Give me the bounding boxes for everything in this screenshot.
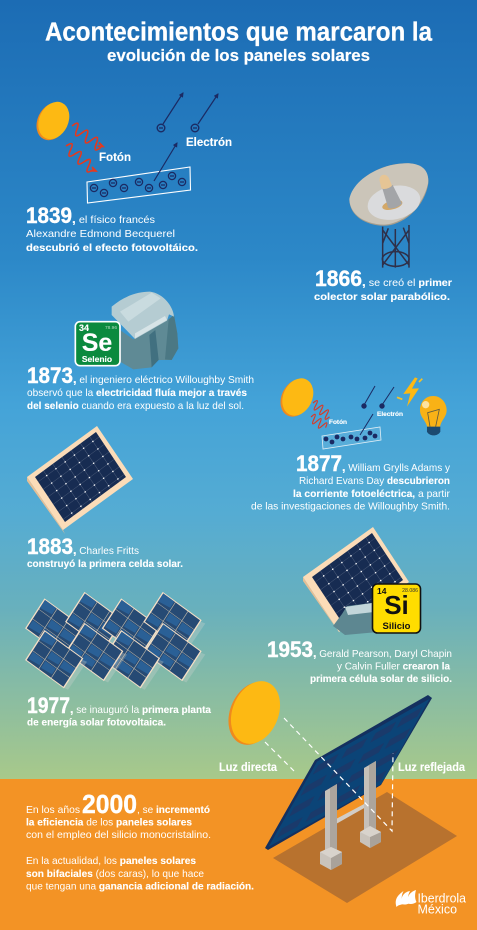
dashed light rays (265, 718, 393, 831)
text: 1883: 1883 (27, 534, 73, 559)
label: Luz directa: Luz directa (219, 762, 278, 774)
text: 2000: con el empleo del silicio monocristalino. (26, 829, 211, 841)
badge text: Se: 78.96 (105, 325, 117, 331)
element badge: silicon: Si (384, 590, 409, 620)
text: 1866: colector solar parabólico. (314, 291, 450, 303)
text: actualidad: son bifaciales (dos caras), lo que hace (26, 868, 204, 880)
text: 1839 (26, 203, 198, 254)
text: 1839: descubrió el efecto fotovoltáico. (26, 242, 198, 254)
orange ground panel (0, 779, 477, 930)
text: 1977: de energía solar fotovoltaica. (27, 716, 166, 728)
illustration: solar cell 1883 (27, 426, 133, 534)
text: 1873: del selenio cuando era expuesto a la luz del sol. (27, 400, 244, 412)
text: 1977 (27, 693, 211, 728)
text: 1839: Alexandre Edmond Becquerel (26, 228, 175, 240)
illustration: selenium rock and element badge (75, 292, 178, 369)
text: 1873 (27, 363, 254, 412)
tower (382, 225, 409, 268)
text: 1877: 1877 (296, 451, 342, 476)
front post (320, 784, 342, 870)
text: 1953: primera célula solar de silicio. (310, 673, 452, 685)
text: 2000 (26, 789, 211, 841)
text: 1866 (314, 266, 452, 303)
text: 1877 (251, 451, 451, 512)
label: Electrón small: Electrón (377, 411, 403, 418)
label: Luz reflejada: Luz reflejada (398, 762, 466, 774)
badge text: Se: 34 (79, 323, 89, 333)
text: 1877: , William Grylls Adams y (342, 459, 451, 474)
text: 1873: 1873 (27, 363, 73, 388)
bifacial solar panel (265, 695, 432, 850)
text: 1953: y Calvin Fuller crearon la (337, 660, 450, 672)
icon: photon waves (308, 400, 332, 431)
title (45, 18, 433, 65)
text: 1877: la corriente fotoeléctrica, a partir (293, 488, 450, 500)
badge text: Se: Se (82, 329, 112, 357)
text: 1839: , el físico francés (72, 211, 155, 226)
badge text: Se: Selenio (82, 354, 112, 364)
element badge: silicon (372, 584, 420, 633)
logo: Iberdrola México: México (418, 902, 457, 916)
badge text: Se (79, 323, 117, 364)
element badge: silicon: Silicio (383, 621, 411, 632)
text: 1877: de las investigaciones de Willoughby Smith. (251, 500, 450, 512)
text: 2000: En los años (26, 804, 80, 816)
text: 2000: la eficiencia de los paneles solares (26, 816, 192, 828)
illustration: solar panel and silicon 1953 (303, 527, 420, 635)
solar panel (303, 527, 409, 635)
dish (349, 163, 428, 226)
text: 1873: observó que la electricidad fluía mejor a través (27, 387, 247, 399)
text: 1953: , Gerald Pearson, Daryl Chapin (313, 645, 452, 660)
text: 1866: , se creó el primer (362, 274, 452, 289)
silicon rock (333, 603, 378, 635)
label: Fotón: Fotón (99, 152, 131, 164)
illustration: photoelectric effect 1839 (31, 93, 232, 203)
icon: sun disc (275, 373, 319, 422)
icon: lightning bolt (397, 377, 422, 407)
arrows (360, 386, 394, 435)
text: actualidad: que tengan una ganancia adicional de radiación. (26, 880, 254, 892)
element badge: silicon: 14 (377, 586, 387, 596)
illustration: bifacial panel (219, 674, 466, 903)
logo: Iberdrola México (396, 890, 466, 916)
logo: Iberdrola México: Iberdrola (418, 892, 466, 906)
material plate (322, 427, 381, 449)
big sun disc (220, 674, 289, 752)
text: 1877: Richard Evans Day descubrieron (299, 475, 450, 487)
label: Fotón small: Fotón (329, 419, 347, 426)
illustration: parabolic solar collector (349, 163, 428, 268)
text: 1866: 1866 (315, 266, 362, 291)
text: 1883: , Charles Fritts (73, 542, 139, 557)
illustration: solar plant 1977 (25, 592, 205, 690)
text: actualidad: En la actualidad, los paneles solares (26, 855, 196, 867)
label: Electrón: Electrón (186, 137, 232, 149)
text: 1873: , el ingeniero eléctrico Willoughby Smith (73, 371, 254, 386)
icon: photon waves (62, 122, 104, 174)
element badge: selenium (75, 322, 120, 366)
text: 1953: 1953 (267, 637, 313, 662)
rock (112, 292, 178, 369)
text: 1839: 1839 (26, 203, 72, 228)
element badge: silicon: 28.086 (402, 588, 418, 594)
icon: sun disc (31, 97, 75, 145)
arrows: escaping electrons (154, 93, 218, 181)
text: 1977: , se inauguró la primera planta (70, 701, 211, 716)
crossbar (336, 803, 366, 824)
text: 1883: construyó la primera celda solar. (27, 558, 183, 570)
material plate with electrons (87, 167, 190, 203)
title: Acontecimientos que marcaron la (45, 18, 433, 46)
illustration: photoelectric current 1877 (275, 373, 447, 449)
text: 1977: 1977 (27, 693, 70, 718)
text: 2000: , se incrementó (137, 804, 210, 816)
icon: light bulb (420, 396, 447, 435)
text: 1883 (27, 534, 183, 570)
text: 2000: 2000 (82, 789, 137, 819)
ground shadow (273, 792, 457, 903)
text: 1953 (267, 637, 452, 685)
text: actualidad (26, 855, 254, 892)
title: evolución de los paneles solares (107, 47, 370, 65)
back post (360, 761, 381, 848)
